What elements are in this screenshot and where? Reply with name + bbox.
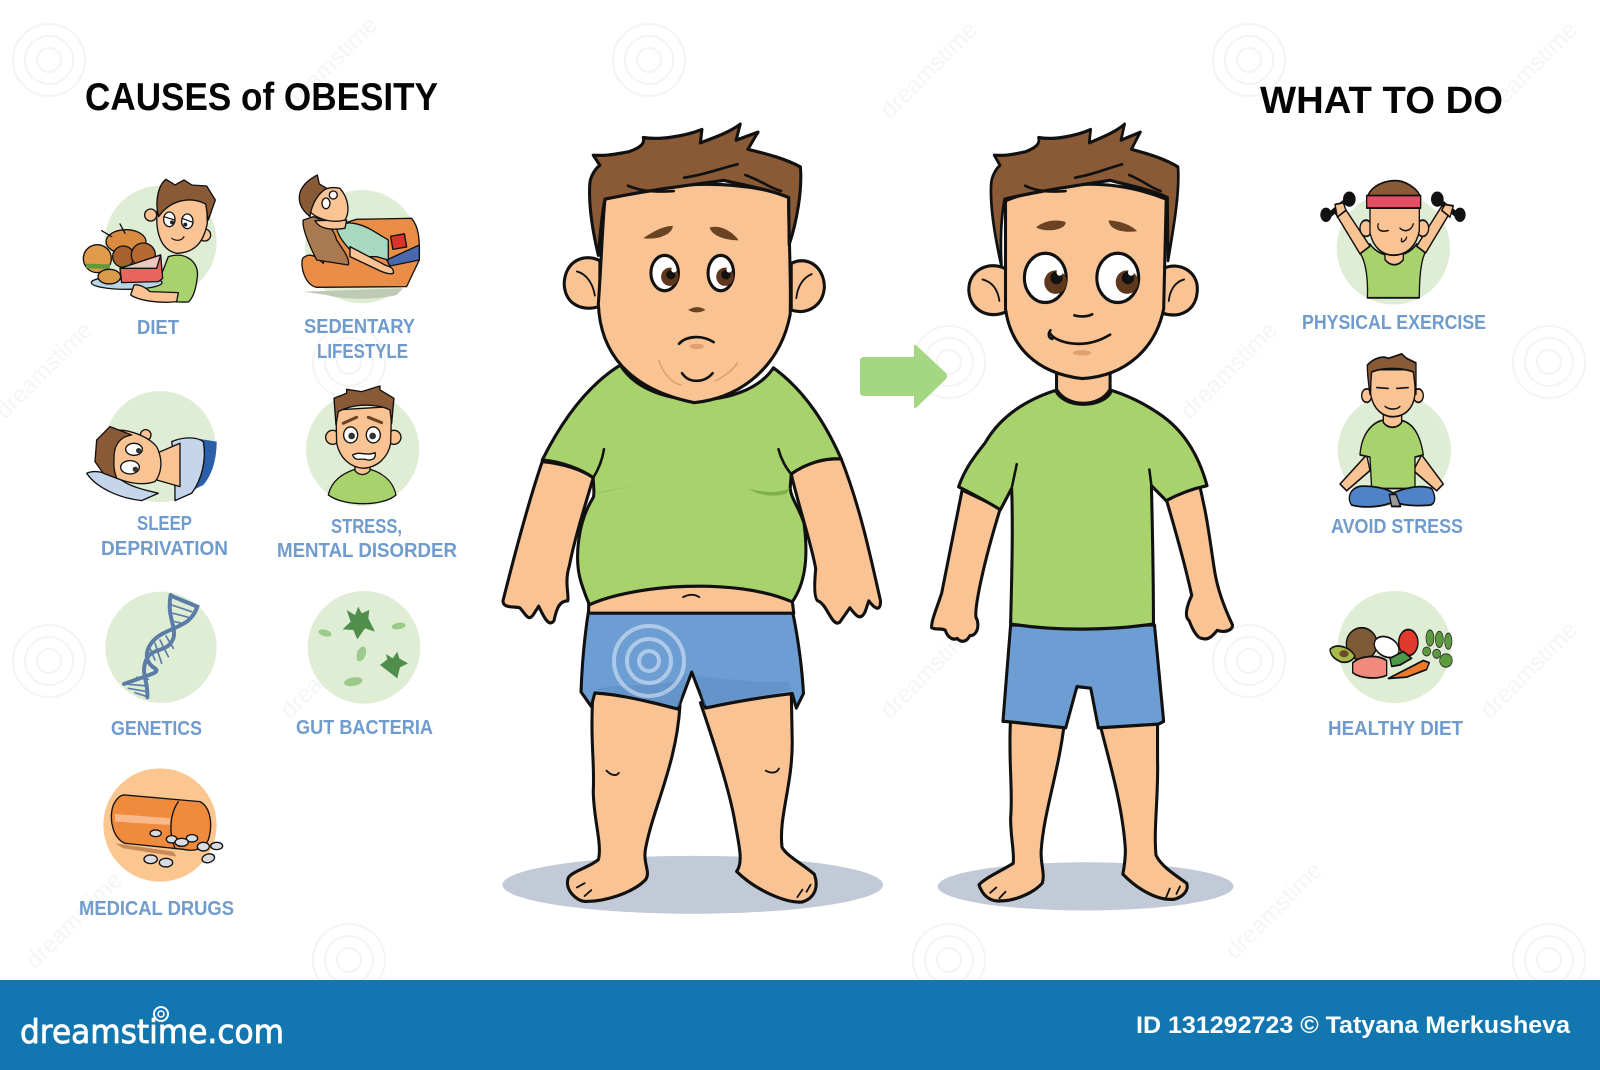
icon: man with food plate	[83, 179, 217, 302]
cause: medical drugs	[79, 768, 234, 920]
t-shirt	[542, 365, 841, 605]
arrow: before to after	[860, 345, 947, 408]
icon: man meditating	[1338, 354, 1451, 507]
shorts	[1003, 625, 1164, 728]
shorts	[581, 610, 803, 709]
label: sleep deprivation: SLEEP	[137, 513, 192, 535]
icon: stressed man	[306, 386, 419, 506]
label: sedentary lifestyle: SEDENTARY	[304, 316, 416, 338]
belly	[589, 586, 794, 613]
remedy: physical exercise	[1302, 181, 1486, 334]
label: sleep deprivation: DEPRIVATION	[101, 538, 228, 560]
remedy: healthy diet	[1328, 591, 1463, 740]
face	[1024, 221, 1139, 356]
right leg	[700, 687, 816, 902]
icon: bacteria	[308, 591, 420, 704]
hair	[991, 124, 1178, 266]
label: sleep deprivation	[101, 513, 228, 560]
label: stress, mental disorder: MENTAL DISORDER	[277, 540, 458, 562]
head	[598, 184, 790, 403]
label: genetics: GENETICS	[111, 718, 202, 740]
cause: sleep deprivation	[87, 391, 228, 560]
right leg	[1100, 719, 1187, 899]
right arm	[1166, 475, 1233, 639]
watermark pattern: dreamstime	[275, 11, 383, 119]
heading: what to do: WHAT TO DO	[1260, 80, 1503, 122]
watermark pattern: dreamstime	[20, 866, 128, 974]
ground shadow	[938, 862, 1234, 911]
legs	[567, 687, 680, 901]
neck	[1057, 368, 1110, 403]
icon: spilled pill bottle	[103, 768, 223, 882]
left leg	[979, 719, 1064, 901]
label: diet: DIET	[137, 317, 179, 339]
figure: after, slim man	[932, 124, 1234, 911]
label: physical exercise: PHYSICAL EXERCISE	[1302, 312, 1486, 334]
t-shirt	[959, 390, 1207, 629]
footer logo: dreamstime.com	[20, 1012, 284, 1051]
left arm	[932, 490, 1000, 641]
ears	[969, 266, 1197, 315]
watermark pattern: dreamstime	[1175, 316, 1283, 424]
ground shadow	[502, 856, 883, 914]
label: avoid stress: AVOID STRESS	[1331, 516, 1463, 538]
right arm	[791, 459, 881, 623]
icon: man reclining on sofa	[299, 175, 419, 303]
icon: healthy food	[1330, 591, 1452, 703]
cause: gut bacteria	[296, 591, 433, 739]
watermark pattern: dreamstime	[1475, 616, 1583, 724]
cause: genetics	[105, 592, 217, 740]
cause: sedentary lifestyle	[299, 175, 419, 363]
watermark pattern: dreamstime	[1475, 16, 1583, 124]
head	[1006, 184, 1166, 379]
icon: man lifting dumbbells	[1320, 181, 1466, 305]
label: stress, mental disorder: STRESS,	[331, 516, 402, 538]
ears	[564, 258, 824, 312]
watermark pattern: dreamstime	[875, 616, 983, 724]
panel: causes of obesity	[79, 76, 458, 920]
remedy: avoid stress	[1331, 354, 1463, 538]
footer credit: ID 131292723 © Tatyana Merkusheva	[1136, 1012, 1571, 1039]
watermark on shorts	[614, 626, 684, 696]
label: gut bacteria: GUT BACTERIA	[296, 717, 433, 739]
figure: before, overweight man	[502, 124, 883, 914]
footer bar	[0, 980, 1600, 1070]
label: sedentary lifestyle: LIFESTYLE	[317, 341, 408, 363]
label: stress, mental disorder	[277, 516, 458, 562]
cause: diet	[83, 179, 217, 339]
label: healthy diet: HEALTHY DIET	[1328, 718, 1463, 740]
cause: stress, mental disorder	[277, 386, 458, 562]
watermark pattern: dreamstime	[275, 616, 383, 724]
label: medical drugs: MEDICAL DRUGS	[79, 898, 234, 920]
watermark pattern: dreamstime	[875, 16, 983, 124]
label: sedentary lifestyle	[304, 316, 416, 363]
heading: causes of obesity: CAUSES of OBESITY	[85, 76, 438, 119]
face	[643, 226, 739, 385]
panel: what to do	[1260, 80, 1503, 740]
hair	[590, 124, 801, 255]
left arm	[503, 462, 593, 623]
icon: DNA helix	[105, 592, 217, 703]
watermark pattern: dreamstime	[1220, 856, 1328, 964]
icon: tired man in bed	[87, 391, 217, 502]
